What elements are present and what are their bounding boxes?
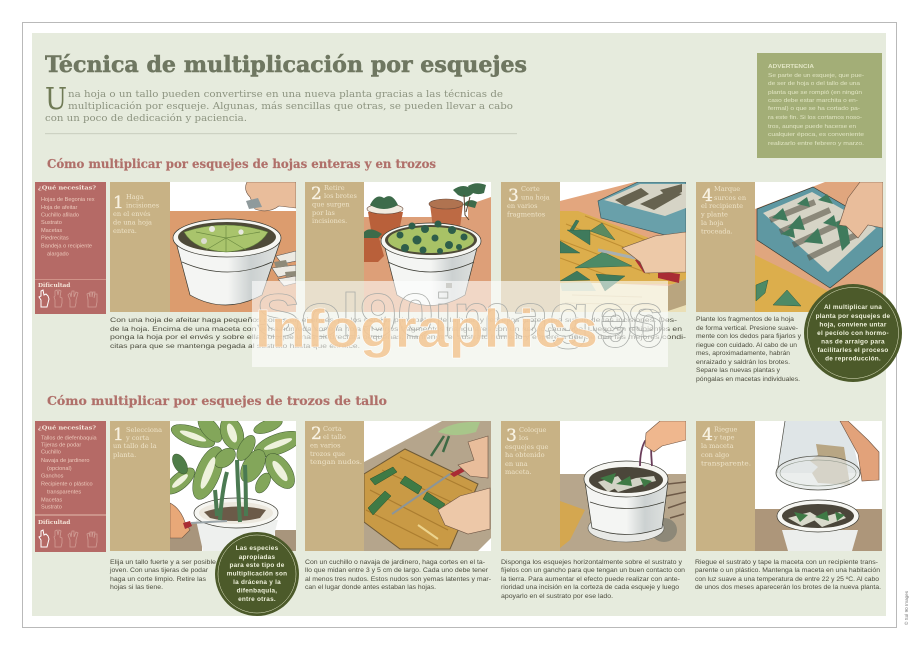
step 2.3: los <box>519 434 529 442</box>
advertencia box: caso debe estar marchita o en- <box>768 98 858 104</box>
panel: materials section 2: Recipiente o plástico <box>41 482 93 488</box>
panel: materials section 1: Hoja de afeitar <box>41 205 78 211</box>
body text step 1 to 3 section 1: de la hoja. Encima de una maceta con tierra húmeda corte la hoja en varios fragmentos triangulares con un nervio cada uno. Luego, en recipientes en <box>110 326 683 333</box>
step 2.4: transparente. <box>701 460 751 468</box>
step 2.3: en una <box>505 460 528 468</box>
step 2.1: un tallo de la <box>113 442 157 450</box>
panel: materials section 1: Piedrecitas <box>41 236 69 242</box>
step 2.3: esquejes que <box>505 443 549 451</box>
watermark: Infographics <box>255 299 598 359</box>
step 2.1: 1 <box>113 425 124 445</box>
callout: rooting hormones: planta por esquejes de <box>816 313 891 320</box>
panel: materials section 2: Navaja de jardinero <box>41 458 90 464</box>
step 1.2: Retire <box>324 184 345 192</box>
panel: materials section 1: Dificultad <box>38 283 70 289</box>
body text step 4 section 1: enraizado y saldrán los brotes. <box>696 359 790 366</box>
panel: materials section 1: Cuchillo afilado <box>41 212 79 218</box>
panel: materials section 2: (opcional) <box>47 466 72 472</box>
intro text: na hoja o un tallo pueden convertirse en una nueva planta gracias a las técnicas de <box>68 89 503 100</box>
intro text: multiplicación por esqueje. Algunas, más sencillas que otras, se pueden llevar a cabo <box>68 101 513 112</box>
step 2.3: ha obtenido <box>505 451 545 459</box>
step 1.1: 1 <box>113 193 124 213</box>
drop cap: U <box>45 82 67 117</box>
body text step 4 section 1: mes, aproximadamente, habrán <box>696 350 791 357</box>
body text step 4 section 1: riegue con cuidado. Al cabo de un <box>696 342 798 349</box>
callout: rooting hormones: facilitarles el proceso <box>817 347 889 354</box>
step 1.4: surcos en <box>714 194 747 202</box>
step 2.2: en varios <box>310 442 341 450</box>
step 1.3: en varios <box>507 202 538 210</box>
body text step 4 section 1 <box>696 316 802 383</box>
title: Técnica de multiplicación por esquejes <box>45 52 527 78</box>
body text step 1 to 3 section 1: Con una hoja de afeitar haga pequeños cortes en el envés, en los nervios principales de la hoja, y retire los brotes que surjan de las incisiones. Des- <box>110 317 677 324</box>
body text step 4 section 1: de forma vertical. Presione suave- <box>696 325 798 332</box>
body text section 2 step 2: al menos tres nudos. Estos nudos son yemas latentes y mar- <box>305 576 491 583</box>
body text section 2 step 3: apoyarlo en el sustrato por ese lado. <box>501 593 613 600</box>
body text section 2 step 4: Riegue el sustrato y tape la maceta con un recipiente trans- <box>695 559 878 566</box>
intro text <box>45 82 513 124</box>
cutting board <box>560 211 686 284</box>
step 2.2: tengan nudos. <box>310 458 362 466</box>
panel: materials section 2: Macetas <box>41 498 62 504</box>
step 1.1: Haga <box>126 193 144 201</box>
body text section 2 step 4: de unos dos meses aparecerán los brotes de la nueva planta. <box>695 584 881 591</box>
advertencia box: Se parte de un esqueje, que pue- <box>768 73 864 79</box>
callout: suitable species: la drácena y la <box>233 579 281 586</box>
panel: materials section 2: Tijeras de podar <box>41 442 81 448</box>
body text section 2 step 2: can el lugar donde antes estaban las hojas. <box>305 584 436 591</box>
step 1.4: 4 <box>702 186 713 206</box>
body text section 2 step 3 <box>501 559 686 600</box>
body text step 1 to 3 section 1: citas para que se mantenga pegada al sustrato hasta que enraíce. <box>110 343 360 350</box>
watermark: Sol90images <box>256 282 664 349</box>
body text section 2 step 3: Disponga los esquejes horizontalmente sobre el sustrato y <box>501 559 683 566</box>
step 2.3 <box>501 421 686 551</box>
panel: materials section 1: Sustrato <box>41 220 62 226</box>
step 1.1: de una hoja <box>113 218 152 226</box>
body text step 4 section 1: póngalas en macetas individuales. <box>696 376 800 383</box>
illustration: pots with sprouts <box>364 182 491 312</box>
callout: rooting hormones <box>804 284 902 382</box>
body text section 2 step 4: parente o un plástico. Mantenga la maceta en una habitación <box>695 567 881 574</box>
step 1.2: los brotes <box>324 192 357 200</box>
step 2.4: Riegue <box>714 426 737 434</box>
panel: materials section 2: transparentes <box>47 490 81 496</box>
step 1.4: la hoja <box>701 219 723 227</box>
illustration: cutting stem on board <box>364 421 491 551</box>
body text section 2 step 3: fíjelos con un gancho para que tengan un buen contacto con <box>501 567 686 574</box>
body text section 2 step 1 <box>109 559 217 591</box>
panel: materials section 2 <box>35 421 106 552</box>
step 1.2: incisiones. <box>312 217 347 225</box>
body text section 2 step 2 <box>305 559 491 591</box>
advertencia box: cualquier época, es conveniente <box>768 132 865 138</box>
illustration: covering pot with dome <box>755 421 882 551</box>
step 1.4: y plante <box>700 210 728 218</box>
step 1.4: troceada. <box>701 228 733 236</box>
body text step 1 to 3 section 1: ponga la hoja por el envés y sobre ella coloque unas piedrecitas pequeñas; mantenga el sustrato húmedo y espere a que se den las mejores condi- <box>110 334 686 341</box>
advertencia box: ADVERTENCIA <box>768 64 815 70</box>
advertencia box: planta que se rompió (en ningún <box>768 90 862 96</box>
watermark <box>252 281 668 367</box>
body text section 2 step 3: rioridad una incisión en la corteza de cada esqueje y luego <box>501 584 680 591</box>
panel: materials section 1: Bandeja o recipiente <box>41 244 92 250</box>
callout: suitable species: apropiadas <box>239 554 275 561</box>
callout: rooting hormones: de reproducción. <box>825 356 881 362</box>
step 2.1: Selecciona <box>126 426 162 434</box>
panel: materials section 1: ¿Qué necesitas? <box>38 184 97 192</box>
advertencia box: fermal) o que se ha cortado pa- <box>768 106 860 112</box>
advertencia box: realizarlo entre febrero y marzo. <box>768 141 864 147</box>
step 2.4: y tape <box>713 434 735 442</box>
callout: suitable species: difenbaquia, <box>237 588 277 594</box>
step 2.3: 3 <box>506 426 517 446</box>
tray <box>598 182 686 235</box>
step 1.3: una hoja <box>521 194 550 202</box>
body text section 2 step 4 <box>695 559 881 591</box>
panel: materials section 2: ¿Qué necesitas? <box>38 424 97 432</box>
panel: materials section 1: alargado <box>47 252 69 258</box>
step 2.2 <box>305 421 491 551</box>
body text section 2 step 3: la tierra. Para aumentar el efecto puede realizar con ante- <box>501 576 680 583</box>
step 2.1: planta. <box>113 451 136 459</box>
callout: rooting hormones: el pecíolo con hormo- <box>817 330 889 337</box>
step 1.4: el recipiente <box>701 202 743 210</box>
illustration: cutting leaf fragments <box>560 182 686 312</box>
advertencia box: ra este fin. Si los cortamos noso- <box>768 115 862 121</box>
step 1.2: que surgen <box>312 200 350 208</box>
copyright credit: © Sol 90 Images <box>903 590 909 625</box>
intro text: con un poco de dedicación y paciencia. <box>45 113 247 124</box>
panel: materials section 2: Cuchillo <box>41 450 61 456</box>
callout: rooting hormones: Al multiplicar una <box>824 304 882 311</box>
step 1.4: Marque <box>714 185 740 193</box>
illustration: dieffenbachia plant <box>170 421 296 551</box>
heading: section 2: Cómo multiplicar por esquejes de trozos de tallo <box>47 393 387 408</box>
step 2.2: Corta <box>323 425 342 433</box>
step 1.1: en el envés <box>113 210 151 218</box>
step 1.1: incisiones <box>126 202 160 210</box>
callout: suitable species: multiplicación son <box>227 570 287 578</box>
illustration: pot with hook <box>560 421 686 551</box>
icon: difficulty hands <box>39 290 97 307</box>
body text step 4 section 1: Separe las nuevas plantas y <box>696 367 781 374</box>
callout: suitable species: Las especies <box>236 545 279 552</box>
icon: difficulty hands <box>39 530 97 547</box>
leaves <box>560 220 632 291</box>
step 1.3: 3 <box>508 186 519 206</box>
panel: materials section 2: Sustrato <box>41 504 62 510</box>
body text section 2 step 2: llo que midan entre 3 y 5 cm de largo. Cada uno debe tener <box>305 567 488 574</box>
body text section 2 step 4: con luz suave a una temperatura de entre 22 y 25 ºC. Al cabo <box>695 576 880 583</box>
step 2.2: 2 <box>311 424 322 444</box>
step 1.4 <box>696 182 883 312</box>
illustration: planting fragments in tray <box>755 182 883 312</box>
watermark: 90 <box>600 299 665 359</box>
step 2.3: Coloque <box>519 426 547 434</box>
heading: section 1: Cómo multiplicar por esquejes de hojas enteras y en trozos <box>47 156 436 171</box>
callout: suitable species <box>215 532 299 616</box>
panel: materials section 2: Tallos de diefenbaquia <box>41 436 98 442</box>
callout: rooting hormones: nas de arraigo para <box>821 338 885 346</box>
step 2.4: la maceta <box>701 442 734 450</box>
advertencia box: de ser de hoja o del tallo de una <box>768 81 861 87</box>
body text section 2 step 2: Con un cuchillo o navaja de jardinero, haga cortes en el ta- <box>305 559 485 566</box>
panel: materials section 2: Ganchos <box>41 474 64 480</box>
callout: suitable species: entre otras. <box>238 596 276 603</box>
panel: materials section 1: Hojas de Begonia rex <box>41 197 95 203</box>
step 1.3: Corte <box>521 185 540 193</box>
step 1.1 <box>110 182 296 312</box>
step 1.3: fragmentos <box>507 210 546 218</box>
callout: rooting hormones: hoja, conviene untar <box>819 322 887 328</box>
step 1.1: entera. <box>113 227 137 235</box>
callout: suitable species: para este tipo de <box>229 562 285 569</box>
panel: materials section 2: Dificultad <box>38 520 70 526</box>
step 2.2: trozos que <box>310 450 345 458</box>
advertencia box: tros, aunque puede hacerse en <box>768 124 856 130</box>
step 2.2: el tallo <box>323 433 346 441</box>
step 2.4: 4 <box>702 425 713 445</box>
step 2.3: maceta. <box>505 468 531 476</box>
panel: materials section 1 <box>35 182 106 314</box>
body text section 2 step 1: Elija un tallo fuerte y a ser posible <box>110 559 217 566</box>
body text section 2 step 1: joven. Con unas tijeras de podar <box>109 567 208 574</box>
panel: materials section 1: Macetas <box>41 228 62 234</box>
advertencia box <box>757 53 882 158</box>
step 1.2 <box>305 182 491 312</box>
knife and hand <box>598 250 635 258</box>
step 2.1 <box>110 421 296 551</box>
body text step 4 section 1: mente con los dedos para fijarlos y <box>696 333 802 340</box>
step 2.4: con algo <box>701 451 729 459</box>
step 1.2: 2 <box>311 184 322 204</box>
body text section 2 step 1: hojas si las tiene. <box>110 584 163 591</box>
step 1.3 <box>501 182 686 312</box>
step 2.1: y corta <box>125 434 149 442</box>
step 2.4 <box>696 421 882 551</box>
body text section 2 step 1: haga un corte limpio. Retire las <box>110 576 206 583</box>
body text step 4 section 1: Plante los fragmentos de la hoja <box>696 316 795 323</box>
step 1.2: por las <box>312 209 335 217</box>
body text step 1 to 3 section 1 <box>110 317 686 350</box>
illustration: pot with leaf <box>170 182 296 312</box>
